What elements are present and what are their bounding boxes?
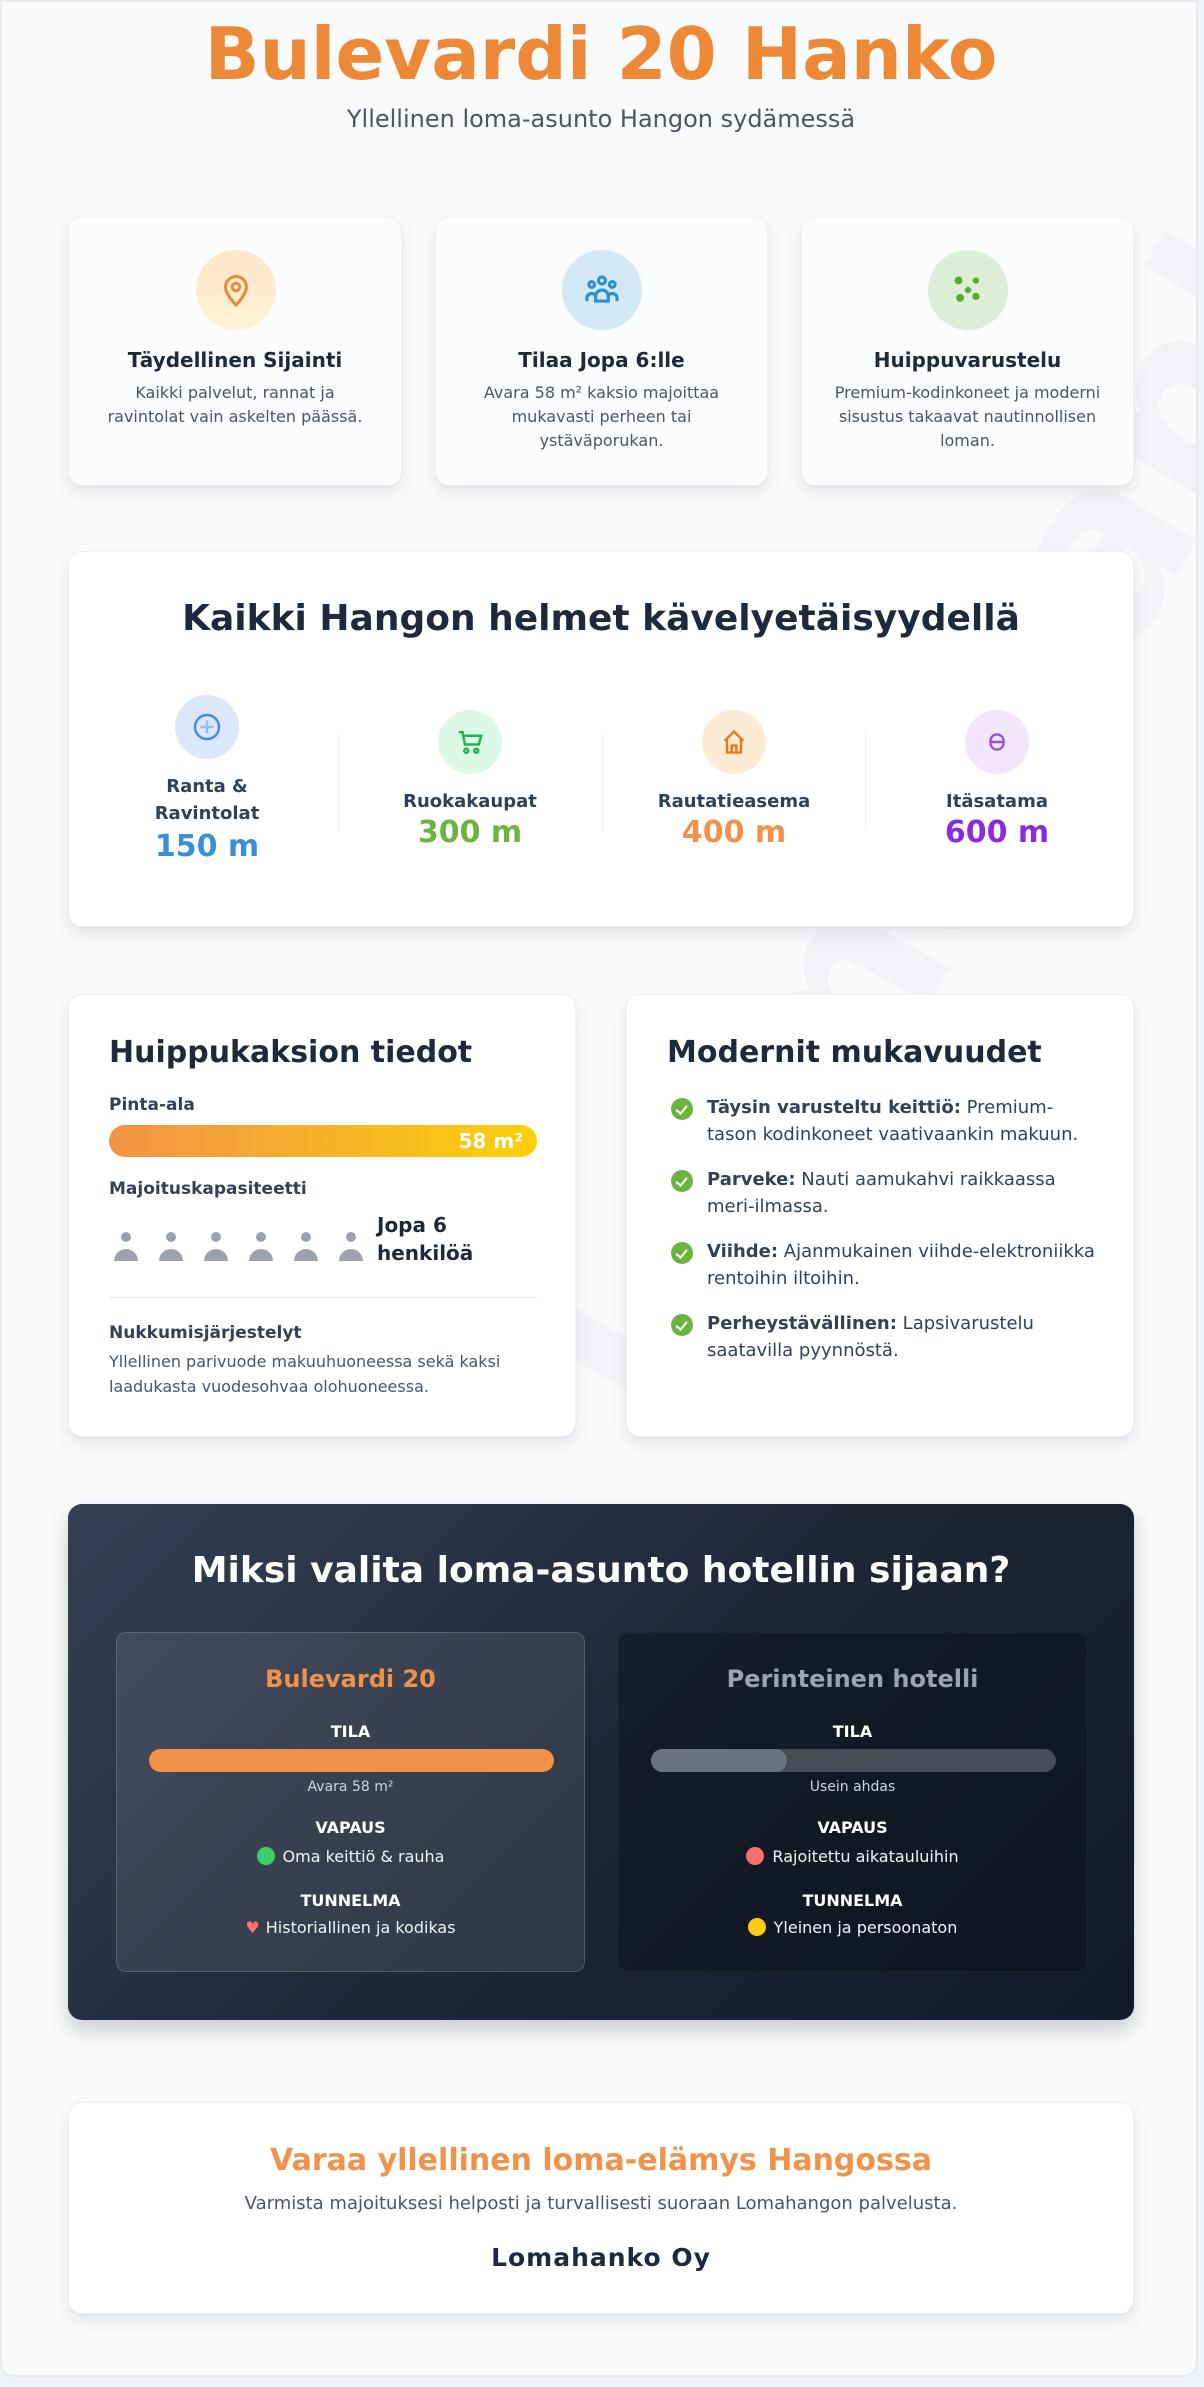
heading: Kaikki Hangon helmet kävelyetäisyydellä — [182, 598, 1020, 639]
area bar: 58 m² — [459, 1129, 523, 1153]
feature card: space: Avara 58 m² kaksio majoittaa mukavasti perheen tai ystäväporukan. — [484, 383, 719, 450]
feature card: equipment — [801, 217, 1134, 486]
amenity: kitchen: Täysin varusteltu keittiö: Premium-tason kodinkoneet vaativaankin makuun. — [707, 1097, 1078, 1145]
card: Bulevardi 20: TUNNELMA — [300, 1891, 401, 1910]
card: traditional hotel: TUNNELMA — [802, 1891, 903, 1910]
location: station: Rautatieasema — [658, 791, 810, 812]
heading: Modernit mukavuudet — [667, 1035, 1042, 1070]
card: Bulevardi 20: TILA — [331, 1722, 370, 1741]
location: station: 400 m — [682, 815, 786, 850]
card: Bulevardi 20: ♥ Historiallinen ja kodikas — [245, 1918, 456, 1937]
feature card: location: Kaikki palvelut, rannat ja ravintolat vain askelten päässä. — [108, 383, 362, 426]
location: groceries: 300 m — [418, 815, 522, 850]
heading: Huippukaksion tiedot — [109, 1035, 472, 1070]
card: traditional hotel: VAPAUS — [817, 1818, 888, 1837]
amenity: balcony: Parveke: Nauti aamukahvi raikkaassa meri-ilmassa. — [707, 1169, 1056, 1217]
location: harbour: Itäsatama — [946, 791, 1048, 812]
card: traditional hotel: Rajoitettu aikatauluihin — [772, 1847, 959, 1866]
feature card: space — [435, 217, 768, 486]
card: traditional hotel: TILA — [833, 1722, 872, 1741]
amenity: family: Perheystävällinen: Lapsivarustelu saatavilla pyynnöstä. — [707, 1313, 1034, 1361]
feature card: equipment: Huippuvarustelu — [874, 348, 1061, 372]
heading: Miksi valita loma-asunto hotellin sijaan? — [192, 1550, 1010, 1591]
location: harbour — [945, 710, 1049, 850]
card: traditional hotel: Perinteinen hotelli — [727, 1665, 978, 1693]
area bar: Pinta-ala — [109, 1095, 195, 1115]
icon: sparkles — [928, 250, 1008, 330]
card: Bulevardi 20 — [116, 1632, 585, 1972]
icon: pin — [196, 250, 276, 330]
capacity: Majoituskapasiteetti — [109, 1179, 307, 1199]
subtitle: Yllellinen loma-asunto Hangon sydämessä — [347, 105, 855, 133]
card: Bulevardi 20: Bulevardi 20 — [265, 1665, 436, 1693]
location: station — [658, 710, 810, 850]
location: beach: Ranta & — [166, 776, 248, 797]
capacity: Jopa 6 — [377, 1213, 447, 1237]
area bar — [109, 1095, 537, 1157]
feature card: equipment: Premium-kodinkoneet ja moderni sisustus takaavat nautinnollisen loman. — [835, 383, 1100, 450]
card: Bulevardi 20: Avara 58 m² — [308, 1779, 393, 1795]
panel: apartment details — [68, 994, 576, 1437]
capacity: henkilöä — [377, 1241, 473, 1265]
panel: comparison — [68, 1504, 1134, 2020]
card: traditional hotel: Usein ahdas — [810, 1779, 895, 1795]
card: traditional hotel — [618, 1632, 1087, 1972]
call to action: Lomahanko Oy — [491, 2243, 711, 2272]
card: Bulevardi 20: VAPAUS — [315, 1818, 386, 1837]
sleeping arrangements: Yllellinen parivuode makuuhuoneessa sekä kaksi laadukasta vuodesohvaa olohuoneessa. — [109, 1352, 500, 1396]
location: harbour: 600 m — [945, 815, 1049, 850]
title: Bulevardi 20 Hanko — [205, 12, 997, 96]
card: Bulevardi 20: Oma keittiö & rauha — [283, 1847, 444, 1866]
capacity — [109, 1179, 473, 1265]
call to action: Varaa yllellinen loma-elämys Hangossa — [270, 2143, 932, 2178]
sleeping arrangements — [109, 1323, 500, 1396]
feature card: space: Tilaa Jopa 6:lle — [518, 348, 685, 372]
call to action — [68, 2102, 1134, 2314]
location: groceries: Ruokakaupat — [403, 791, 537, 812]
location: beach — [155, 695, 259, 864]
location: beach: 150 m — [155, 829, 259, 864]
location: beach: Ravintolat — [155, 803, 259, 824]
feature card: location: Täydellinen Sijainti — [128, 348, 342, 372]
panel: amenities — [626, 994, 1134, 1437]
sleeping arrangements: Nukkumisjärjestelyt — [109, 1323, 302, 1343]
icon: people — [562, 250, 642, 330]
panel: walking distances — [68, 551, 1134, 927]
card: traditional hotel: Yleinen ja persoonaton — [774, 1918, 957, 1937]
location: groceries — [403, 710, 537, 850]
call to action: Varmista majoituksesi helposti ja turvallisesti suoraan Lomahangon palvelusta. — [245, 2193, 957, 2214]
amenity: entertainment: Viihde: Ajanmukainen viihde-elektroniikka rentoihin iltoihin. — [707, 1241, 1095, 1289]
feature card: location — [68, 217, 402, 486]
